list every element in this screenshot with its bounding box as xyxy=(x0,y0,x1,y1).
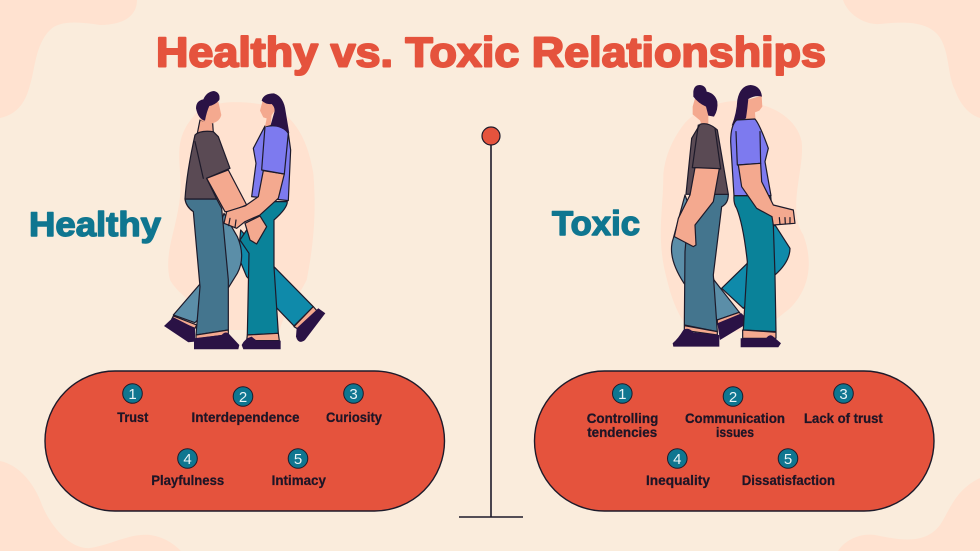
item 4: Inequality: Inequality xyxy=(646,472,710,488)
item 4: Playfulness: Playfulness xyxy=(151,472,224,488)
item 2: Interdependence: 2 xyxy=(239,389,247,406)
heading: Healthy: Healthy xyxy=(29,206,161,244)
title: Healthy vs. Toxic Relationships xyxy=(156,28,826,76)
item 1: Controlling tendencies: Controlling xyxy=(587,410,658,426)
illustration: healthy couple holding hands xyxy=(164,91,325,349)
item 1: Controlling tendencies: 1 xyxy=(618,386,626,403)
item 2: Communication issues: Communication xyxy=(685,410,785,426)
item 4: Playfulness xyxy=(151,449,224,488)
item 4: Inequality: 4 xyxy=(673,451,681,468)
item 1: Trust: Trust xyxy=(117,409,149,425)
item 5: Intimacy: 5 xyxy=(294,451,302,468)
item 1: Trust: 1 xyxy=(128,386,137,403)
item 2: Communication issues xyxy=(685,387,785,440)
item 1: Controlling tendencies xyxy=(587,384,658,440)
item 4: Inequality xyxy=(646,449,710,488)
item 5: Dissatisfaction xyxy=(742,449,835,488)
panel: toxic list xyxy=(534,371,934,511)
item 2: Communication issues: 2 xyxy=(729,389,737,406)
item 5: Intimacy xyxy=(272,449,326,488)
item 3: Lack of trust: Lack of trust xyxy=(804,410,883,426)
item 3: Curiosity xyxy=(326,384,382,425)
item 1: Controlling tendencies: tendencies xyxy=(587,424,657,440)
item 3: Lack of trust xyxy=(804,384,883,426)
item 5: Dissatisfaction: 5 xyxy=(784,451,792,468)
item 3: Curiosity: Curiosity xyxy=(326,409,382,425)
item 5: Dissatisfaction: Dissatisfaction xyxy=(742,472,835,488)
item 3: Curiosity: 3 xyxy=(349,386,358,403)
item 2: Interdependence: Interdependence xyxy=(192,409,300,425)
item 4: Playfulness: 4 xyxy=(183,451,192,468)
illustration: toxic couple facing away xyxy=(661,85,809,347)
item 3: Lack of trust: 3 xyxy=(839,386,848,403)
item 2: Interdependence xyxy=(192,387,300,425)
panel: healthy list xyxy=(45,371,444,511)
item 1: Trust xyxy=(117,384,149,425)
heading: Toxic: Toxic xyxy=(552,205,640,243)
item 5: Intimacy: Intimacy xyxy=(272,472,326,488)
item 2: Communication issues: issues xyxy=(716,424,754,440)
divider: vertical pin with red dot xyxy=(459,127,523,517)
